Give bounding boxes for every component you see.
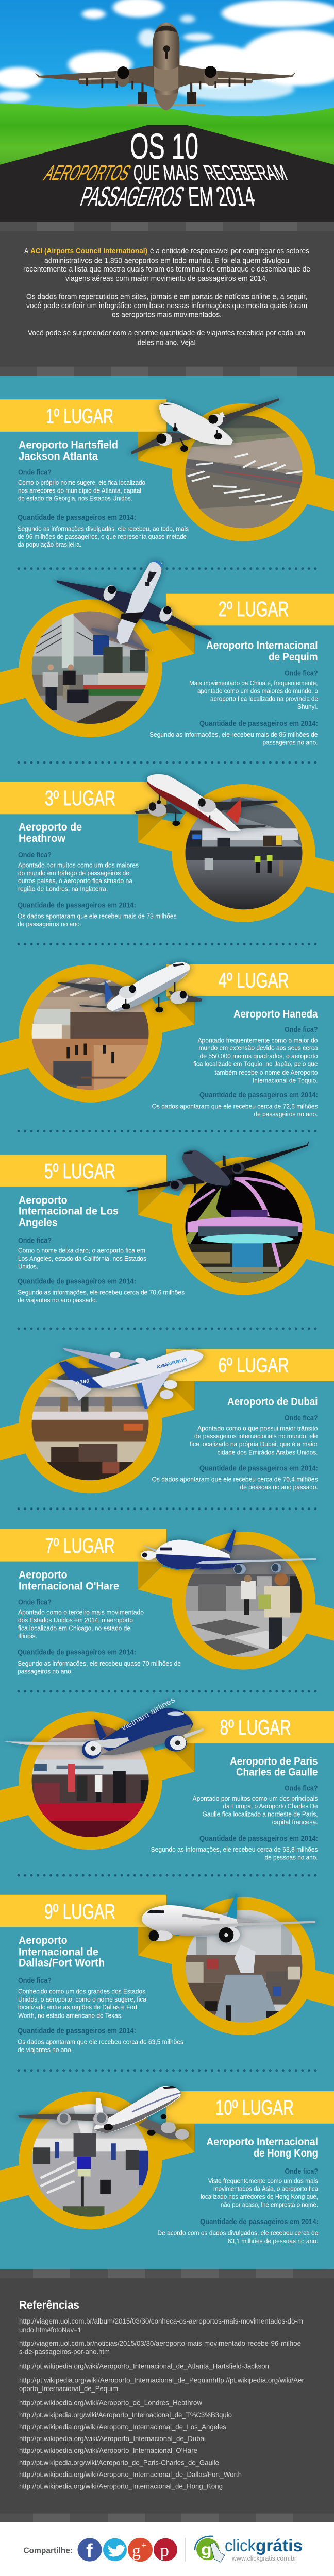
banner: 9º lugar: 9º LUGAR xyxy=(44,1900,115,1923)
text: onde fica Hong Kong: não por acaso, lhe empresta o nome. xyxy=(221,2201,318,2208)
airplane 8: Vietnam Airlines jet: vietnam airlines xyxy=(119,1696,177,1732)
text: onde fica Dubai: Onde fica? xyxy=(285,1414,318,1422)
banner: 5º lugar xyxy=(0,1155,166,1187)
text: passageiros Dubai: Os dados apontaram que ele recebeu cerca de 70,4 milhões xyxy=(152,1476,318,1483)
section 2: Pequim xyxy=(0,561,334,746)
text: passageiros O'Hare xyxy=(18,1649,181,1675)
hero grass hills xyxy=(0,104,334,167)
heading: O'Hare xyxy=(19,1568,119,1592)
references list: http://viagem.uol.com.br/noticias/2015/03/30/aeroporto-mais-movimentado-recebe-96-milhoe xyxy=(19,2340,301,2347)
ribbon band 4 xyxy=(0,996,194,1075)
heading: Hong Kong: de Hong Kong xyxy=(254,2147,318,2159)
references list xyxy=(19,2317,304,2490)
hero: sky, grass, runway, plane and title xyxy=(0,0,334,222)
share label: Compartilhe: xyxy=(24,2547,73,2555)
ring 1 xyxy=(172,403,315,541)
text: onde fica Paris: da Europa, o Aeroporto Charles De xyxy=(223,1802,318,1810)
ribbon band 10 xyxy=(0,2124,194,2202)
text: onde fica O'Hare: dos Estados Unidos em 2014, o aeroporto xyxy=(18,1616,133,1624)
heading: Hong Kong: Aeroporto Internacional xyxy=(206,2135,318,2148)
references list: http://pt.wikipedia.org/wiki/Aeroporto_Internacional_de_Pequimhttp://pt.wikipedia.org/wiki/Aer xyxy=(19,2377,304,2384)
references list: http://viagem.uol.com.br/album/2015/03/30/conheca-os-aeroportos-mais-movimentados-do-m xyxy=(19,2317,303,2325)
section 10: Hong Kong xyxy=(0,2086,334,2245)
intro paragraph 1: viagens aéreas com maior movimento de passageiros em 2014. xyxy=(65,274,268,283)
photo: Haneda terminal xyxy=(30,976,151,1092)
title words: PASSAGEIROS EM 2014: EM xyxy=(187,181,214,212)
banner: 4º lugar xyxy=(166,964,334,996)
text: passageiros Los Angeles: Quantidade de passageiros em 2014: xyxy=(18,1278,136,1285)
banner: 6º lugar xyxy=(166,1349,334,1381)
heading: Dallas: Dallas/Fort Worth xyxy=(19,1956,105,1969)
text: onde fica Heathrow: Apontado por muitos como um dos maiores xyxy=(18,861,139,869)
text: onde fica Pequim: Shunyi. xyxy=(297,703,318,710)
text: onde fica Haneda: mundo em extensão devido aos seus cerca xyxy=(199,1044,318,1052)
heading: Los Angeles xyxy=(19,1194,119,1229)
text: onde fica O'Hare: Onde fica? xyxy=(18,1599,52,1606)
icon: facebook xyxy=(77,2538,102,2562)
intro paragraph 1: ACI (Airports Council International) xyxy=(30,247,147,256)
intro paragraph 1: é a entidade responsável por congregar os setores xyxy=(150,247,309,256)
text: passageiros Haneda: Os dados apontaram que ele recebeu cerca de 72,8 milhões xyxy=(152,1103,318,1110)
title words: PASSAGEIROS EM 2014: 2014 xyxy=(213,181,258,212)
text: onde fica Haneda xyxy=(193,1026,318,1084)
icon: twitter xyxy=(103,2538,127,2561)
logo: clickgrátis xyxy=(195,2536,303,2562)
banner: 7º lugar xyxy=(0,1529,166,1562)
ring 5 xyxy=(172,1157,315,1295)
photo: Beijing terminal xyxy=(30,611,151,727)
banner: 7º lugar: 7º LUGAR xyxy=(45,1534,115,1557)
text: passageiros O'Hare: Segundo as informações, ele recebeu quase 70 milhões de xyxy=(18,1659,181,1667)
text: onde fica Dubai xyxy=(190,1414,318,1456)
intro paragraph 2: você pode conferir um infográfico com base nessas informações que mostra quais foram xyxy=(26,301,307,310)
text: onde fica Dallas xyxy=(18,1977,147,2020)
text: onde fica Dallas: Onde fica? xyxy=(18,1977,52,1985)
text: onde fica Los Angeles: Unidos. xyxy=(18,1263,38,1270)
text: onde fica Dallas: Worth, no estado americano do Texas. xyxy=(18,2012,123,2020)
references list: s-de-passageiros-por-ano.htm xyxy=(19,2348,110,2355)
text: passageiros Paris: Quantidade de passageiros em 2014: xyxy=(199,1835,318,1843)
photo: O'Hare corridor xyxy=(183,1543,305,1659)
ribbon band 7 xyxy=(138,1562,334,1641)
text: passageiros Paris: de pessoas no ano. xyxy=(265,1854,318,1861)
text: passageiros Dubai: Quantidade de passageiros em 2014: xyxy=(199,1465,318,1472)
text: passageiros Dallas xyxy=(18,2027,183,2054)
icon: facebook: f xyxy=(86,2540,93,2561)
airplane 8: Vietnam Airlines jet xyxy=(4,1696,204,1759)
text: onde fica Los Angeles xyxy=(18,1237,146,1270)
heading: Haneda: Aeroporto Haneda xyxy=(233,1008,318,1020)
heading: O'Hare: Aeroporto xyxy=(19,1568,68,1581)
airplane 6: Airbus A380: A380 xyxy=(155,1362,169,1369)
text: onde fica Heathrow xyxy=(18,851,139,893)
heading: Atlanta: Aeroporto Hartsfield xyxy=(19,438,118,451)
heading: Atlanta xyxy=(19,438,118,463)
text: onde fica Haneda: Internacional de Tóquio. xyxy=(253,1077,318,1084)
text: passageiros Atlanta: de 96 milhões de passageiros, o que representa quase metade xyxy=(18,533,187,540)
text: onde fica Atlanta: nos arredores do município de Atlanta, capital xyxy=(18,487,141,494)
text: onde fica Los Angeles: Los Angeles, estado da Califórnia, nos Estados xyxy=(18,1255,146,1262)
airplane 2: white and navy jet xyxy=(57,561,212,651)
text: passageiros Los Angeles: de viajantes no ano passado. xyxy=(18,1296,97,1304)
text: onde fica Haneda: fica localizado em Tóquio, no Japão, pelo que xyxy=(193,1060,318,1067)
text: passageiros Paris xyxy=(151,1835,318,1861)
text: onde fica Dubai: fica localizado na própria Dubai, que é a maior xyxy=(190,1440,318,1448)
footer share bar xyxy=(24,2536,303,2562)
banner: 6º lugar: 6º LUGAR xyxy=(218,1353,289,1377)
ring 9 xyxy=(172,1897,315,2035)
icon: pinterest: p xyxy=(160,2540,169,2560)
ring 7 xyxy=(172,1532,315,1670)
text: passageiros Los Angeles xyxy=(18,1278,185,1304)
intro paragraph 3: deles no ano. Veja! xyxy=(138,338,196,347)
section 1: Atlanta xyxy=(0,398,334,548)
text: passageiros Pequim: Segundo as informações, ele recebeu mais de 86 milhões de xyxy=(149,731,318,738)
text: passageiros Paris: Segundo as informações, ele recebeu cerca de 63,8 milhões xyxy=(151,1845,318,1853)
text: passageiros Pequim: passageiros no ano. xyxy=(262,739,318,746)
text: passageiros O'Hare: passageiros no ano. xyxy=(18,1667,73,1675)
text: onde fica Haneda: também recebe o nome de Aeroporto xyxy=(214,1069,318,1076)
hero title xyxy=(41,126,291,212)
text: passageiros Dubai xyxy=(152,1465,318,1491)
banner: 3º lugar xyxy=(0,782,166,814)
heading: Los Angeles: Internacional de Los xyxy=(19,1205,119,1217)
text: onde fica Hong Kong: Visto frequentemente como um dos mais xyxy=(208,2177,318,2184)
text: onde fica Hong Kong: movimentados da Ásia, o aeroporto fica xyxy=(213,2185,319,2193)
photo: Charles de Gaulle terminal xyxy=(30,1723,151,1839)
text: passageiros Atlanta xyxy=(18,514,189,548)
text: passageiros O'Hare: Quantidade de passageiros em 2014: xyxy=(18,1649,136,1657)
ring 8 xyxy=(19,1711,162,1850)
title words: QUE MAIS RECEBERAM: QUE xyxy=(133,161,160,184)
references heading: Referências xyxy=(19,2298,79,2311)
intro paragraph 2 xyxy=(26,293,307,319)
text: passageiros Heathrow: Os dados apontaram que ele recebeu mais de 73 milhões xyxy=(18,912,177,920)
banner: 8º lugar xyxy=(166,1711,334,1743)
text: onde fica O'Hare: Apontado como o terceiro mais movimentado xyxy=(18,1608,144,1616)
hero runway xyxy=(0,125,334,222)
hero sky and clouds xyxy=(0,0,334,126)
heading: Los Angeles: Aeroporto xyxy=(19,1194,68,1206)
logo url: www.clickgratis.com.br xyxy=(231,2554,297,2562)
text: onde fica Paris: Apontado por muitos como um dos principais xyxy=(193,1794,318,1802)
banner: 4º lugar: 4º LUGAR xyxy=(218,969,289,992)
references list: http://pt.wikipedia.org/wiki/Aeroporto_de_Paris-Charles_de_Gaulle xyxy=(19,2459,219,2466)
banner: 9º lugar xyxy=(0,1895,166,1927)
ribbon band 9 xyxy=(138,1927,334,2006)
text: onde fica Dallas: localizado entre as regiões de Dallas e Fort xyxy=(18,2003,138,2011)
banner: 10º lugar xyxy=(166,2091,334,2124)
references list: undo.htm#fotoNav=1 xyxy=(19,2326,81,2334)
text: onde fica Dallas: Unidos, o aeroporto, como o nome sugere, fica xyxy=(18,1995,147,2003)
text: onde fica O'Hare: Illinois. xyxy=(18,1632,37,1640)
heading: Atlanta: Jackson Atlanta xyxy=(19,450,98,463)
text: onde fica Pequim: apontado como um dos maiores do mundo, o xyxy=(197,687,318,694)
teal main panel xyxy=(0,376,334,2269)
text: onde fica Paris xyxy=(193,1785,318,1826)
text: passageiros Dubai: de pessoas no ano passado. xyxy=(240,1483,318,1491)
text: onde fica Haneda: Onde fica? xyxy=(285,1026,318,1034)
logo mark xyxy=(195,2536,225,2562)
heading: Dallas xyxy=(19,1934,105,1969)
heading: Pequim xyxy=(206,639,318,663)
text: onde fica Dubai: cidade dos Emirádos Árabes Unidos. xyxy=(218,1449,318,1456)
text: onde fica Los Angeles: Onde fica? xyxy=(18,1237,52,1245)
text: onde fica Haneda: de 550.000 metros quadrados, o aeroporto xyxy=(200,1052,318,1060)
text: passageiros Atlanta: Quantidade de passageiros em 2014: xyxy=(18,514,136,522)
photo: Heathrow terminal xyxy=(183,795,305,911)
heading: Heathrow: Aeroporto de xyxy=(19,820,82,833)
text: passageiros Dallas: Os dados apontaram que ele recebeu cerca de 63,5 milhões xyxy=(18,2038,183,2046)
text: onde fica Atlanta: Onde fica? xyxy=(18,469,52,477)
photo: Dubai terminal xyxy=(30,1366,151,1482)
references panel xyxy=(0,2269,334,2522)
intro paragraph 1: A xyxy=(24,247,29,256)
intro dark panel xyxy=(0,222,334,376)
ring 4 xyxy=(19,964,162,1103)
icon: google plus: g xyxy=(132,2541,141,2560)
text: passageiros Heathrow: de passageiros no ano. xyxy=(18,920,81,928)
text: onde fica Paris: Onde fica? xyxy=(285,1785,318,1792)
banner: 8º lugar: 8º LUGAR xyxy=(220,1716,291,1739)
airplane 9: white jet with teal tail xyxy=(142,1894,315,1943)
references list: http://pt.wikipedia.org/wiki/Aeroporto_Internacional_de_Atlanta_Hartsfield-Jackson xyxy=(19,2363,269,2370)
title word: AEROPORTOS: AEROPORTOS xyxy=(41,161,135,185)
airplane 6: Airbus A380: A380 xyxy=(74,1379,90,1386)
title line: OS 10: OS 10 xyxy=(130,126,198,166)
references list: http://pt.wikipedia.org/wiki/Aeroporto_Internacional_de_Dubai xyxy=(19,2435,206,2443)
text: onde fica O'Hare: fica localizado em Chicago, no estado de xyxy=(18,1624,130,1632)
heading: Pequim: Aeroporto Internacional xyxy=(206,639,318,652)
logo mark: g xyxy=(201,2540,212,2559)
airplane 4: blue tail jet xyxy=(58,962,203,1012)
ribbon band 3 xyxy=(138,814,334,893)
heading: Hong Kong xyxy=(206,2135,318,2159)
text: onde fica Heathrow: Onde fica? xyxy=(18,851,52,859)
title words: QUE MAIS RECEBERAM xyxy=(133,161,291,185)
references list: http://pt.wikipedia.org/wiki/Aeroporto_Internacional_O'Hare xyxy=(19,2447,197,2454)
text: passageiros Heathrow xyxy=(18,902,177,928)
banner: 2º lugar: 2º LUGAR xyxy=(218,598,289,621)
text: onde fica Heathrow: outros países, o aeroporto fica situado na xyxy=(18,877,133,885)
heading: Paris: Aeroporto de Paris xyxy=(230,1755,318,1767)
text: onde fica O'Hare xyxy=(18,1599,144,1640)
references list: http://pt.wikipedia.org/wiki/Aeroporto_de_Londres_Heathrow xyxy=(19,2399,202,2407)
text: onde fica Heathrow: do mundo em tráfego de passageiros de xyxy=(18,869,129,877)
title words: PASSAGEIROS EM 2014: PASSAGEIROS xyxy=(77,181,188,212)
heading: Los Angeles: Angeles xyxy=(19,1216,58,1229)
banner: 3º lugar: 3º LUGAR xyxy=(45,787,115,810)
banner: 10º lugar: 10º LUGAR xyxy=(215,2096,294,2119)
heading: Heathrow: Heathrow xyxy=(19,832,65,844)
intro paragraph 2: os aeroportos mais movimentados. xyxy=(112,311,222,319)
banner: 1º lugar: 1º LUGAR xyxy=(46,404,113,428)
heading: Heathrow xyxy=(19,820,82,844)
text: passageiros Pequim xyxy=(149,720,318,746)
text: onde fica Atlanta: Como o próprio nome sugere, ele fica localizado xyxy=(18,479,145,486)
airplane 7: blue and white jumbo xyxy=(141,1529,316,1574)
ring 10 xyxy=(19,2092,162,2229)
banner: 1º lugar xyxy=(0,399,166,432)
text: onde fica Pequim: Onde fica? xyxy=(285,670,318,678)
ring 6 xyxy=(19,1355,162,1493)
ring 2 xyxy=(19,599,162,737)
heading: Paris xyxy=(230,1755,318,1778)
intro paragraph 2: Os dados foram repercutidos em sites, jornais e em portais de notícias online e, a seguir, xyxy=(26,293,307,301)
icon: pinterest xyxy=(154,2538,177,2561)
text: passageiros Heathrow: Quantidade de passageiros em 2014: xyxy=(18,902,136,909)
intro paragraph 3 xyxy=(28,329,305,347)
text: onde fica Hong Kong: Onde fica? xyxy=(285,2167,318,2176)
text: onde fica Paris: capital francesa. xyxy=(272,1818,318,1826)
intro paragraph 1 xyxy=(23,247,310,283)
text: onde fica Paris: Gaulle fica localizado a nordeste de Paris, xyxy=(203,1810,318,1818)
references list: oporto_Internacional_de_Pequim xyxy=(19,2385,118,2393)
airplane 1: white jet xyxy=(131,398,279,454)
text: onde fica Atlanta: do estado da Geórgia, nos Estados Unidos. xyxy=(18,495,132,502)
text: onde fica Dallas: Conhecido como um dos grandes dos Estados xyxy=(18,1988,145,1995)
section 6: Dubai xyxy=(0,1348,334,1493)
text: onde fica Pequim: Mais movimentado da China e, frequentemente, xyxy=(189,679,318,687)
title words: QUE MAIS RECEBERAM: MAIS xyxy=(162,161,200,184)
heading: Dallas: Aeroporto xyxy=(19,1934,68,1946)
text: passageiros Pequim: Quantidade de passageiros em 2014: xyxy=(199,720,318,728)
heading: Dubai: Aeroporto de Dubai xyxy=(227,1395,318,1408)
section 3: Heathrow xyxy=(0,774,334,928)
airplane 10: four engine jet xyxy=(18,2086,189,2140)
references list: http://pt.wikipedia.org/wiki/Aeroporto_Internacional_de_Hong_Kong xyxy=(19,2483,223,2490)
section 7: O'Hare xyxy=(0,1529,334,1675)
logo: clickgrátis: grátis xyxy=(256,2536,303,2555)
photo: Atlanta airport aerial xyxy=(183,414,305,529)
text: passageiros Haneda xyxy=(152,1091,318,1118)
ring 3 xyxy=(172,784,315,922)
text: passageiros Dallas: de viajantes no ano. xyxy=(18,2046,73,2054)
icon: google plus xyxy=(128,2538,153,2562)
logo wordmark: click xyxy=(225,2536,256,2555)
ribbon band 2 xyxy=(0,625,194,704)
text: passageiros Hong Kong: 63,1 milhões de pessoas no ano. xyxy=(228,2237,318,2245)
text: onde fica Hong Kong xyxy=(201,2167,319,2208)
text: onde fica Los Angeles: Como o nome deixa claro, o aeroporto fica em xyxy=(18,1247,145,1255)
text: onde fica Haneda: Apontado frequentemente como o maior do xyxy=(197,1037,318,1044)
section 5: Los Angeles xyxy=(0,1140,334,1304)
text: passageiros Haneda: Quantidade de passageiros em 2014: xyxy=(199,1091,318,1099)
intro paragraph 3: Você pode se surpreender com a enorme quantidade de viajantes recebida por cada um xyxy=(28,329,305,337)
heading: Paris: Charles de Gaulle xyxy=(236,1766,318,1778)
intro paragraph 1: administrativos de 1.850 aeroportos em todo mundo. E foi ela quem divulgou xyxy=(44,257,289,265)
text: onde fica Atlanta xyxy=(18,469,145,502)
airplane 6: Airbus A380: AIRBUS xyxy=(166,1357,188,1367)
ribbon band 6 xyxy=(0,1381,194,1460)
text: passageiros Atlanta: Segundo as informações divulgadas, ele recebeu, ao todo, mais xyxy=(18,525,189,532)
heading: Dallas: Internacional de xyxy=(19,1945,98,1958)
text: passageiros Dallas: Quantidade de passageiros em 2014: xyxy=(18,2027,136,2035)
airplane 6: Airbus A380 xyxy=(48,1348,204,1409)
ribbon band 1 xyxy=(138,432,334,511)
text: passageiros Los Angeles: Segundo as informações, ele recebeu cerca de 70,6 milhões xyxy=(18,1289,185,1296)
text: onde fica Pequim: aeroporto fica localizado na província de xyxy=(210,695,318,703)
text: passageiros Hong Kong xyxy=(157,2218,319,2245)
text: passageiros Atlanta: da população brasileira. xyxy=(18,540,81,548)
text: onde fica Dubai: Apontado como o que possui maior trânsito xyxy=(197,1425,318,1432)
heading: Pequim: de Pequim xyxy=(269,650,318,663)
banner: 2º lugar xyxy=(166,594,334,625)
airplane 5: dark jet xyxy=(126,1140,309,1193)
text: onde fica Heathrow: região de Londres, na Inglaterra. xyxy=(18,885,108,893)
hero airplane xyxy=(35,22,295,110)
text: passageiros Hong Kong: De acordo com os dados divulgados, ele recebeu cerca de xyxy=(157,2229,318,2236)
ribbon band 5 xyxy=(138,1187,334,1266)
text: onde fica Dubai: de passageiros internacionais no mundo, ele xyxy=(194,1432,318,1440)
heading: O'Hare: Internacional O'Hare xyxy=(19,1580,119,1592)
ribbon band 8 xyxy=(0,1743,194,1822)
section 4: Haneda xyxy=(0,962,334,1118)
references list: http://pt.wikipedia.org/wiki/Aeroporto_Internacional_de_T%C3%B3quio xyxy=(19,2411,232,2419)
banner: 5º lugar: 5º LUGAR xyxy=(44,1160,115,1183)
photo: Dallas terminal xyxy=(183,1908,305,2024)
section 8: Paris xyxy=(0,1696,334,1861)
text: passageiros Haneda: de passageiros no ano. xyxy=(254,1110,318,1118)
references list: http://pt.wikipedia.org/wiki/Aeroporto_Internacional_de_Los_Angeles xyxy=(19,2423,226,2431)
text: passageiros Hong Kong: Quantidade de passageiros em 2014: xyxy=(200,2218,319,2226)
photo: Hong Kong terminal xyxy=(30,2103,151,2218)
references list: http://pt.wikipedia.org/wiki/Aeroporto_Internacional_de_Dallas/Fort_Worth xyxy=(19,2471,242,2478)
text: onde fica Pequim xyxy=(189,670,318,710)
icon: google plus: + xyxy=(141,2540,147,2550)
photo: Los Angeles theme building xyxy=(183,1170,305,1285)
airplane 3: red belly jet xyxy=(135,774,278,831)
section 9: Dallas xyxy=(0,1894,334,2054)
